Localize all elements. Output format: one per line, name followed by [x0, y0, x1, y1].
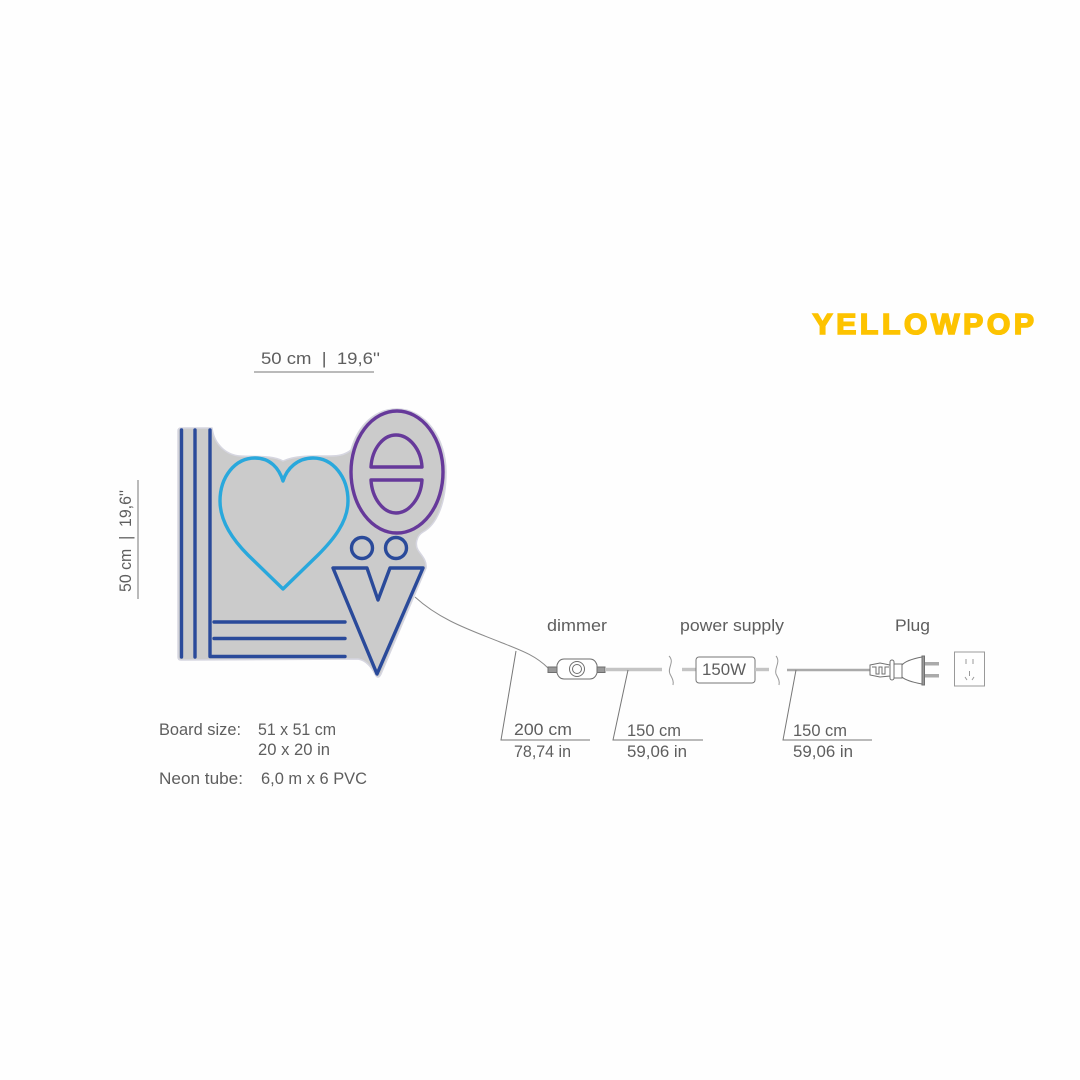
board size specs [159, 721, 336, 759]
wall socket [954, 652, 984, 686]
plug label: Plug [895, 617, 930, 635]
dimmer label: dimmer [547, 617, 608, 635]
power supply [696, 657, 755, 683]
height dimension: 50 cm | 19,6'' [117, 490, 135, 592]
cable to plug [755, 656, 870, 685]
width dimension [254, 350, 380, 372]
L tube lines [182, 430, 345, 657]
oval O tube [351, 411, 443, 533]
neon sign board [178, 409, 446, 677]
neon tube specs: Neon tube: [159, 770, 243, 788]
cable length 200 cm: 78,74 in [514, 743, 571, 761]
power supply: 150W [702, 661, 746, 679]
neon tube specs: 6,0 m x 6 PVC [261, 770, 367, 788]
board backing [178, 409, 446, 677]
logo: YELLOWPOP: YELLOWPOP [812, 309, 1034, 341]
heart tube [220, 458, 348, 589]
cable length 150 cm dimmer [613, 670, 703, 761]
dimmer [548, 659, 605, 679]
width dimension: 50 cm | 19,6'' [261, 350, 380, 368]
cable length 150 cm plug: 150 cm [793, 722, 847, 740]
plug [870, 656, 939, 685]
neon tube specs [159, 770, 367, 788]
V with two dots tube [333, 538, 423, 674]
cable length 150 cm dimmer: 150 cm [627, 722, 681, 740]
cable length 200 cm [501, 651, 590, 761]
power supply label: power supply [680, 617, 785, 635]
board size specs: 51 x 51 cm [258, 721, 336, 739]
wire to dimmer [415, 597, 548, 668]
cable length 200 cm: 200 cm [514, 721, 572, 739]
cable length 150 cm plug [783, 670, 872, 761]
cable length 150 cm plug: 59,06 in [793, 743, 853, 761]
board size specs: 20 x 20 in [258, 741, 330, 759]
board size specs: Board size: [159, 721, 241, 739]
cable length 150 cm dimmer: 59,06 in [627, 743, 687, 761]
cable to power supply [605, 656, 696, 685]
